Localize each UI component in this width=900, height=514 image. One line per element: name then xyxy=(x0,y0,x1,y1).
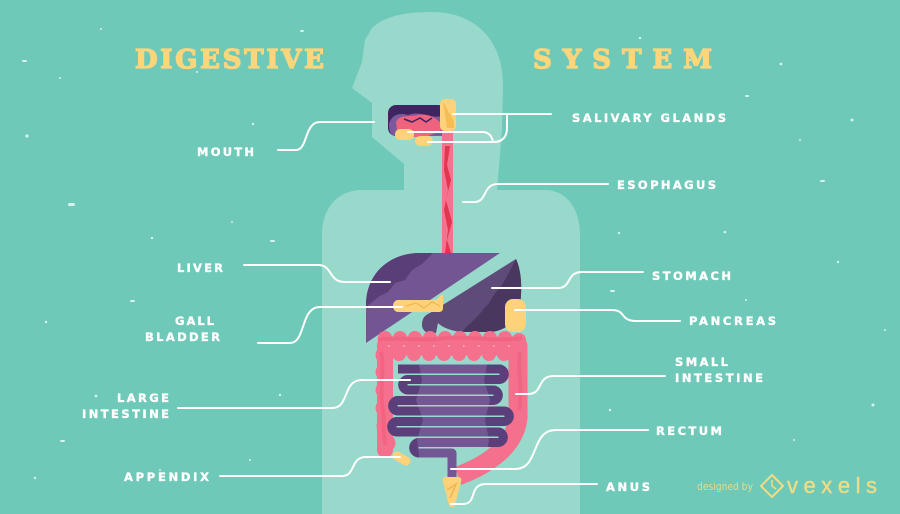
leader lines xyxy=(178,114,680,504)
label: gall bladder xyxy=(145,314,220,344)
credit: designed by vexels xyxy=(697,473,877,498)
label: rectum: RECTUM xyxy=(656,424,722,438)
liver xyxy=(366,253,500,343)
label: anus: ANUS xyxy=(606,480,650,494)
label: small intestine xyxy=(675,355,763,385)
small intestine xyxy=(392,369,509,478)
stomach xyxy=(422,259,521,333)
gall bladder xyxy=(393,294,443,312)
pancreas xyxy=(505,299,526,332)
title: system: SYSTEM xyxy=(533,45,712,75)
label: appendix: APPENDIX xyxy=(124,470,209,484)
anus xyxy=(443,477,461,507)
credit: designed by vexels: vexels xyxy=(787,473,877,498)
label: gall bladder: GALL xyxy=(175,314,215,328)
salivary glands xyxy=(395,99,456,146)
label: small intestine: INTESTINE xyxy=(675,371,763,385)
large intestine xyxy=(376,331,526,476)
label: esophagus: ESOPHAGUS xyxy=(617,178,716,192)
appendix xyxy=(397,456,406,461)
label: stomach: STOMACH xyxy=(652,269,731,283)
label: mouth: MOUTH xyxy=(197,145,254,159)
title: digestive: DIGESTIVE xyxy=(135,45,324,75)
credit: designed by vexels: designed by xyxy=(697,481,753,493)
body silhouette xyxy=(322,12,580,514)
label: large intestine: LARGE xyxy=(117,391,169,405)
label: pancreas: PANCREAS xyxy=(689,314,776,328)
mouth xyxy=(388,105,446,137)
label: salivary glands: SALIVARY GLANDS xyxy=(572,111,726,125)
esophagus xyxy=(442,130,453,253)
label: small intestine: SMALL xyxy=(675,355,729,369)
label: large intestine xyxy=(82,391,169,421)
label: large intestine: INTESTINE xyxy=(82,407,169,421)
label: liver: LIVER xyxy=(177,261,223,275)
label: gall bladder: BLADDER xyxy=(145,330,220,344)
